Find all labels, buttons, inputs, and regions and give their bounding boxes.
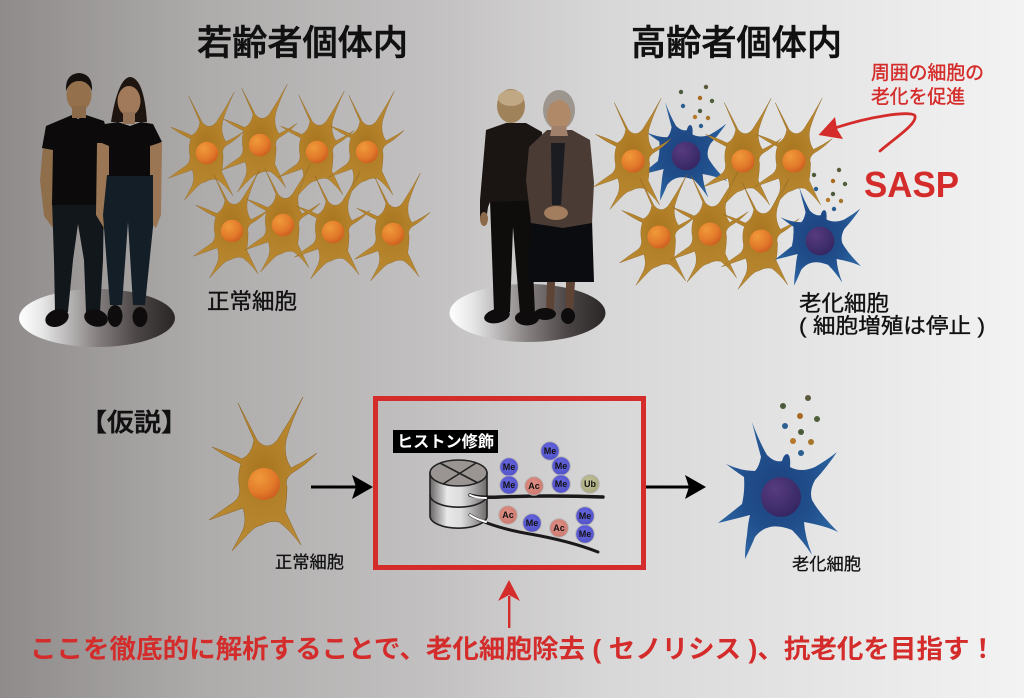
modification markers: Ac [553, 523, 565, 533]
arrow: histone to senescent [646, 475, 706, 499]
annotation: promotes senescence: 周囲の細胞の [871, 62, 984, 84]
label: SASP: SASP [864, 164, 959, 205]
conclusion text: ここを徹底的に解析することで、老化細胞除去 ( セノリシス )、抗老化を目指す！ [30, 634, 996, 664]
histone tails [470, 495, 603, 552]
modification markers: Me [526, 518, 538, 528]
annotation: promotes senescence [871, 62, 984, 108]
platform disc [450, 284, 606, 342]
heading: hypothesis: 【仮説】 [80, 409, 188, 437]
modification markers: Ac [502, 510, 514, 520]
arrow: red up [498, 580, 520, 628]
histone cylinder [430, 460, 487, 528]
modification markers: Me [544, 446, 556, 456]
histone label [393, 430, 498, 453]
cell cluster with senescent cells [593, 98, 861, 289]
modification markers: Me [555, 479, 567, 489]
label: senescent cell small: 老化細胞 [792, 555, 861, 574]
modification markers: Me [503, 462, 515, 472]
icon: normal cell large [209, 397, 317, 551]
label: normal cells: 正常細胞 [207, 289, 297, 314]
label: senescent cell: 老化細胞 [799, 291, 889, 316]
platform disc [19, 289, 175, 347]
man [40, 73, 112, 330]
annotation: promotes senescence: 老化を促進 [871, 86, 965, 108]
modification markers: Me [503, 480, 515, 490]
icon: SASP particles lower [812, 168, 847, 211]
normal cell cluster [168, 84, 430, 281]
histone label: ヒストン修飾 [397, 433, 494, 451]
modification markers [499, 442, 599, 543]
old woman [526, 90, 594, 324]
icon: SASP particles upper [679, 85, 714, 128]
panel: elderly individuals [450, 89, 606, 342]
label: senescent cell: ( 細胞増殖は停止 ) [799, 315, 985, 338]
modification markers: Me [579, 511, 591, 521]
arrow: normal to histone [311, 475, 373, 499]
arrow: SASP to neighbouring cell [818, 114, 915, 151]
modification markers: Ub [584, 479, 596, 489]
label: senescent cell [799, 291, 985, 338]
label: normal cell: 正常細胞 [275, 553, 344, 572]
icon: senescent cell large [718, 422, 838, 559]
panel: young individuals [19, 73, 175, 347]
heading: old: 高齢者個体内 [631, 24, 842, 63]
modification markers: Me [579, 529, 591, 539]
panel: histone modification [376, 398, 644, 568]
icon: SASP particles large [780, 395, 820, 456]
old man [480, 89, 545, 326]
modification markers: Me [555, 461, 567, 471]
modification markers: Ac [528, 481, 540, 491]
woman [96, 77, 162, 327]
heading: young: 若齢者個体内 [197, 24, 408, 63]
